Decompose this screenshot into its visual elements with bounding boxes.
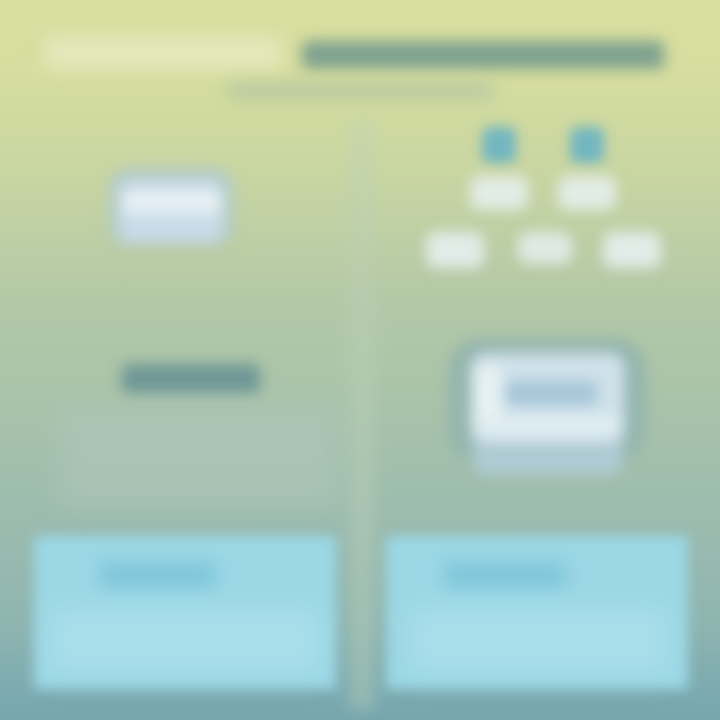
- left section heading: [122, 364, 260, 394]
- illustration white corner: [473, 365, 503, 435]
- panel: bottom right: [386, 536, 688, 689]
- title: dark half: [302, 41, 664, 69]
- lower card right: [603, 232, 661, 268]
- person head right: [570, 127, 604, 163]
- left text panel: [60, 405, 338, 508]
- bottom left panel text: [50, 608, 320, 672]
- subtitle: [228, 83, 493, 99]
- lower card middle: [518, 232, 572, 264]
- bottom right panel heading: [444, 562, 566, 588]
- title: light half: [44, 36, 282, 70]
- bottom right panel text: [410, 608, 668, 672]
- lower card left: [426, 232, 484, 268]
- icon body: [119, 180, 223, 242]
- illustration inner label: [505, 381, 597, 405]
- upper card right: [558, 176, 616, 210]
- central divider: [350, 120, 374, 710]
- right illustration: [446, 335, 648, 480]
- icon highlight: [123, 190, 221, 214]
- person head left: [482, 127, 516, 163]
- bottom left panel heading: [100, 562, 216, 588]
- panel: bottom left: [34, 536, 336, 689]
- illustration halo: [449, 339, 645, 461]
- people diagram: [418, 119, 668, 276]
- illustration card: [471, 353, 625, 443]
- icon glow: [109, 168, 233, 246]
- illustration lower white band: [475, 415, 619, 437]
- left icon: rounded card: [104, 162, 238, 252]
- upper card left: [470, 176, 528, 210]
- illustration lower tray: [473, 395, 623, 475]
